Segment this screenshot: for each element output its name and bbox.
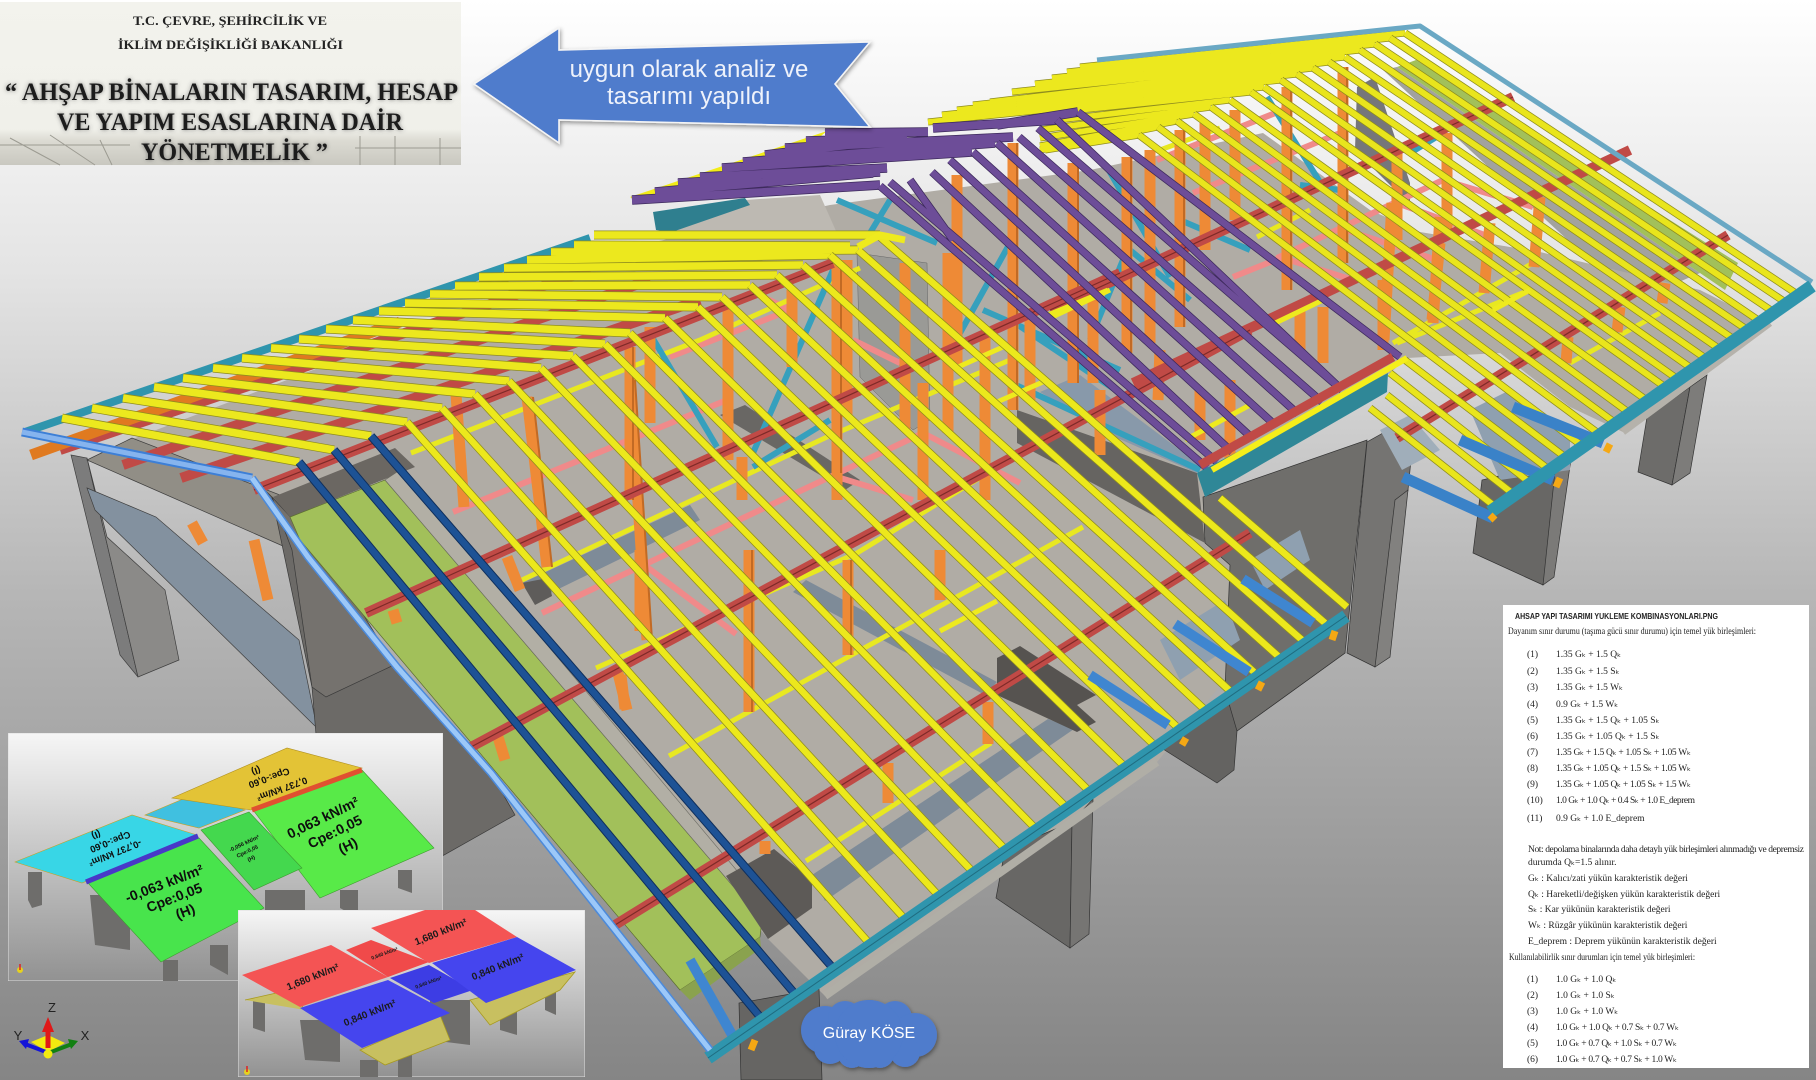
icon: coordinate axes — [14, 1000, 90, 1058]
dormer fascia — [1197, 357, 1407, 497]
inset 2 yellow framing — [245, 972, 575, 1065]
arrow caption: uygun olarak analiz ve — [570, 56, 808, 83]
rear wing trimmers — [940, 290, 1530, 631]
inset wind labels: (H) — [173, 900, 197, 922]
inset middle green roof — [201, 812, 302, 890]
ultimate combinations: 1.35 Gₖ + 1.5 Sₖ — [1556, 667, 1620, 677]
inset wind labels: -0,063 kN/m² — [123, 861, 206, 906]
ultimate combinations: (1) — [1527, 649, 1538, 660]
front wing upper slope rafters — [62, 235, 880, 462]
rear wing eave and gable — [1097, 26, 1812, 520]
notes: durumda Qₖ=1.5 alınır. — [1528, 858, 1617, 868]
ultimate combinations: 1.35 Gₖ + 1.05 Qₖ + 1.5 Sₖ — [1556, 732, 1660, 742]
inset wind labels: (H) — [247, 855, 256, 863]
inset 2 load labels: 0,840 kN/m² — [415, 975, 443, 991]
ultimate combinations: (8) — [1527, 763, 1538, 774]
front wing eave and gable — [22, 432, 1346, 1058]
regulation title: “ AHŞAP BİNALARIN TASARIM, HESAP — [5, 78, 458, 106]
inset yellow roof — [172, 748, 362, 810]
inset wind labels: (H) — [336, 834, 360, 857]
yellow floor joists — [411, 128, 1660, 861]
ministry name: T.C. ÇEVRE, ŞEHİRCİLİK VE — [133, 13, 327, 28]
callout: author cloud — [801, 1000, 937, 1068]
serviceability combinations: 1.0 Gₖ + 1.0 Sₖ — [1556, 991, 1615, 1001]
regulation title: YÖNETMELİK ” — [141, 138, 328, 166]
serviceability combinations: (2) — [1527, 990, 1538, 1001]
serviceability combinations — [1527, 974, 1679, 1065]
notes — [1528, 845, 1804, 947]
inset 2 load labels: 0,840 kN/m² — [371, 946, 399, 962]
rear wing background slabs — [1355, 60, 1738, 290]
ultimate combinations: (5) — [1527, 715, 1538, 726]
ministry name — [118, 13, 343, 52]
ultimate combinations: (6) — [1527, 731, 1538, 742]
notes: E_deprem : Deprem yükünün karakteristik değeri — [1528, 937, 1717, 947]
ultimate combinations: (2) — [1527, 666, 1538, 677]
inset left cyan roof — [15, 815, 197, 883]
ultimate combinations: 1.35 Gₖ + 1.5 Wₖ — [1556, 683, 1623, 693]
regulation title: VE YAPIM ESASLARINA DAİR — [57, 108, 404, 136]
inset building posts — [28, 870, 412, 981]
serviceability combinations: (4) — [1527, 1022, 1538, 1033]
inset wind labels: Cpe:0,05 — [236, 845, 259, 860]
arrow caption: tasarımı yapıldı — [607, 83, 771, 110]
arrow caption — [570, 56, 808, 110]
inset wind labels: (I) — [90, 828, 102, 841]
serviceability heading: Kullanılabilirlik sınır durumları için temel yük birleşimleri: — [1509, 953, 1695, 963]
front concrete wall — [252, 478, 515, 900]
inset left green roof — [88, 838, 264, 962]
inset 2 load labels — [285, 917, 527, 1029]
pink joists — [453, 110, 1533, 634]
notes: Qₖ : Hareketli/değişken yükün karakteristik değeri — [1528, 890, 1720, 900]
front lower concrete posts — [739, 433, 1412, 1080]
ultimate combinations: 1.35 Gₖ + 1.05 Qₖ + 1.05 Sₖ + 1.5 Wₖ — [1556, 780, 1691, 790]
notes: Gₖ : Kalıcı/zati yükün karakteristik değeri — [1528, 874, 1688, 884]
notes: Sₖ : Kar yükünün karakteristik değeri — [1528, 905, 1671, 915]
regulation title — [5, 78, 458, 166]
inset wind labels: -0,056 kN/m² — [228, 834, 261, 854]
rear wing lower slope rafters — [1139, 33, 1797, 505]
ultimate combinations — [1527, 649, 1696, 824]
serviceability combinations: (1) — [1527, 974, 1538, 985]
panel: load combinations — [1503, 605, 1809, 1068]
serviceability combinations: 1.0 Gₖ + 1.0 Qₖ — [1556, 975, 1616, 985]
inset wind labels: (I) — [250, 764, 262, 777]
column shading — [533, 67, 1347, 712]
dormer yellow tie — [858, 235, 905, 247]
panel: regulation title card — [0, 2, 461, 166]
author name: Güray KÖSE — [823, 1024, 915, 1042]
ultimate combinations: (11) — [1527, 813, 1542, 824]
ultimate limit heading: Dayanım sınır durumu (taşıma gücü sınır durumu) için temel yük birleşimleri: — [1508, 626, 1756, 637]
inset wind labels: Cpe:0,05 — [144, 879, 205, 915]
slabs beams and dark boxes on floor — [273, 253, 1570, 1000]
left concrete frame — [71, 438, 317, 728]
serviceability combinations: 1.0 Gₖ + 0.7 Qₖ + 0.7 Sₖ + 1.0 Wₖ — [1556, 1055, 1677, 1065]
ultimate combinations: (3) — [1527, 682, 1538, 693]
dormer back wall — [653, 195, 840, 240]
panel: snow load inset — [238, 910, 585, 1077]
serviceability combinations: (3) — [1527, 1006, 1538, 1017]
upper slope teal and orange eave — [25, 238, 590, 455]
inset wind labels: Cpe:-0,60 — [247, 765, 291, 790]
inset 2 load labels: 1,680 kN/m² — [413, 917, 470, 948]
icon: coordinate axes: Z — [48, 1000, 56, 1015]
serviceability combinations: 1.0 Gₖ + 1.0 Qₖ + 0.7 Sₖ + 0.7 Wₖ — [1556, 1023, 1679, 1033]
ultimate combinations: (10) — [1527, 795, 1543, 806]
ultimate combinations: (7) — [1527, 747, 1538, 758]
inset 2 posts — [253, 990, 556, 1077]
inset right green roof — [253, 770, 434, 898]
serviceability combinations: (5) — [1527, 1038, 1538, 1049]
icon: coordinate axes: X — [81, 1028, 90, 1043]
inset 2 load labels: 0,840 kN/m² — [470, 952, 527, 983]
notes: Not: depolama binalarında daha detaylı yük birleşimleri alınmadığı ve depremsiz — [1528, 845, 1804, 855]
serviceability combinations: (6) — [1527, 1054, 1538, 1065]
serviceability combinations: 1.0 Gₖ + 0.7 Qₖ + 1.0 Sₖ + 0.7 Wₖ — [1556, 1039, 1677, 1049]
ultimate combinations: 1.35 Gₖ + 1.5 Qₖ + 1.05 Sₖ + 1.05 Wₖ — [1556, 748, 1691, 758]
inset suction band — [252, 770, 362, 810]
panel: wind load inset — [8, 733, 443, 981]
inset 2 load labels: 1,680 kN/m² — [285, 962, 342, 993]
inset tiny axis — [17, 964, 23, 973]
inset 2 blue roofs — [300, 937, 576, 1048]
ultimate combinations: (4) — [1527, 699, 1538, 710]
rear wing upper slope rafters — [928, 33, 1405, 150]
inset wind labels: -0,737 kN/m² — [87, 837, 143, 868]
red purlins — [60, 96, 1728, 925]
inset wind labels: Cpe:0,05 — [305, 811, 365, 851]
ultimate combinations: 0.9 Gₖ + 1.0 E_deprem — [1556, 814, 1645, 824]
dormer purple roof — [630, 112, 1400, 468]
serviceability combinations: 1.0 Gₖ + 1.0 Wₖ — [1556, 1007, 1618, 1017]
ultimate combinations: (9) — [1527, 779, 1538, 790]
front wing lower slope rafters — [407, 237, 1347, 943]
ultimate combinations: 1.35 Gₖ + 1.5 Qₖ + 1.05 Sₖ — [1556, 716, 1660, 726]
inset pressure band — [86, 836, 198, 882]
inset wind labels: 0,737 kN/m² — [255, 774, 309, 803]
icon: coordinate axes: Y — [14, 1028, 23, 1043]
inset 2 load labels: 0,840 kN/m² — [342, 998, 399, 1029]
front wing blue rafters — [299, 436, 832, 1018]
concrete floor slab — [130, 133, 1770, 996]
teal braces — [652, 97, 1443, 470]
panel title: AHSAP YAPI TASARIMI YUKLEME KOMBINASYONLARI.PNG — [1515, 611, 1718, 621]
ultimate combinations: 1.35 Gₖ + 1.5 Qₖ — [1556, 650, 1621, 660]
ministry name: İKLİM DEĞİŞİKLİĞİ BAKANLIĞI — [118, 37, 343, 52]
inset wind labels: 0,063 kN/m² — [284, 793, 362, 842]
inset centre cyan roof — [145, 794, 245, 828]
ultimate combinations: 1.0 Gₖ + 1.0 Qₖ + 0.4 Sₖ + 1.0 E_deprem — [1556, 796, 1696, 806]
inset 2 red roofs — [242, 910, 517, 1007]
rear wing concrete posts — [1473, 375, 1707, 585]
inset 2 tiny axis — [244, 1066, 250, 1075]
inset wind labels — [87, 764, 365, 922]
notes: Wₖ : Rüzgâr yükünün karakteristik değeri — [1528, 921, 1688, 931]
ultimate combinations: 1.35 Gₖ + 1.05 Qₖ + 1.5 Sₖ + 1.05 Wₖ — [1556, 764, 1691, 774]
orange columns — [192, 67, 1665, 854]
callout: blue arrow — [474, 28, 870, 143]
inset wind labels: Cpe:-0,60 — [88, 828, 132, 854]
ultimate combinations: 0.9 Gₖ + 1.5 Wₖ — [1556, 700, 1618, 710]
